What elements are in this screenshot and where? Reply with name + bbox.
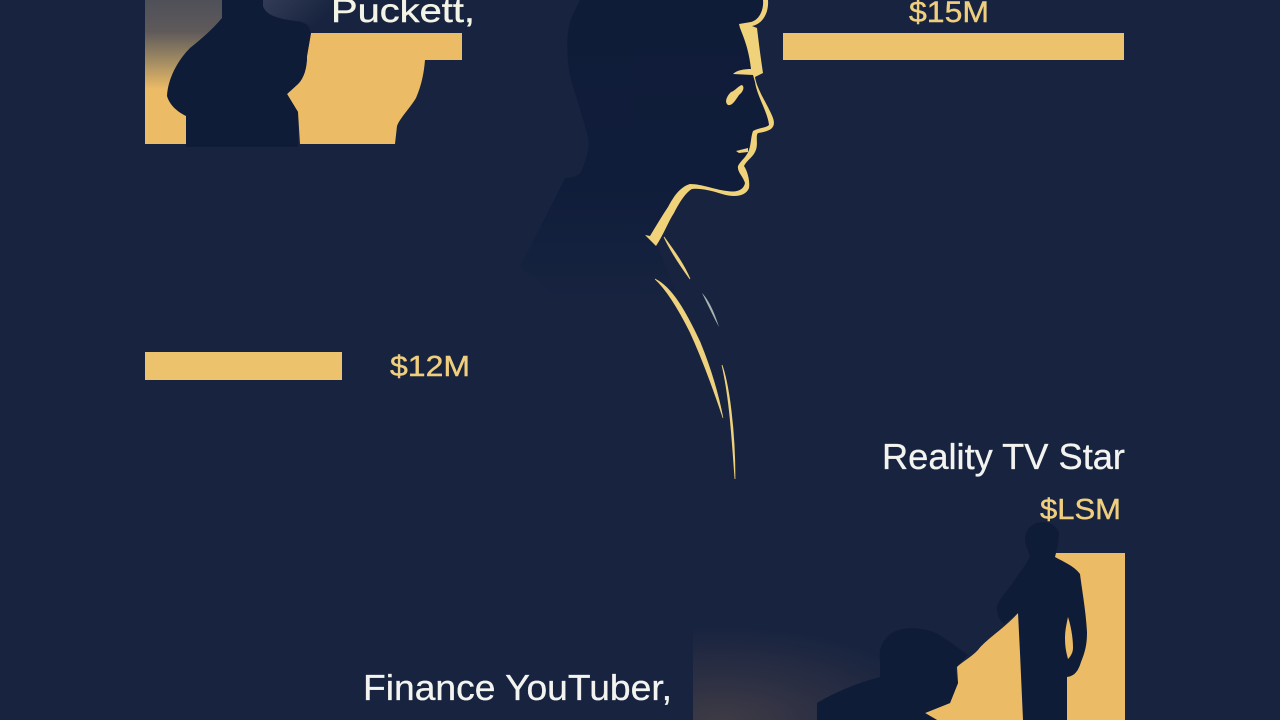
collar and shoulder lines <box>664 237 690 279</box>
label: Finance YouTuber: Finance YouTuber, <box>363 667 672 708</box>
bar <box>145 352 342 380</box>
panel: bottom right bar with silhouettes <box>693 522 1125 720</box>
name: Reality TV Star <box>882 436 1125 477</box>
silhouette: person <box>167 0 311 147</box>
head and shoulders <box>520 0 773 300</box>
gold bar lower shape <box>925 613 1060 720</box>
value bar: $15M <box>783 0 1124 60</box>
panel: Puckett bar chart <box>145 0 475 147</box>
faded glow <box>693 620 933 720</box>
eye <box>726 85 743 105</box>
central profile silhouette <box>520 0 774 479</box>
bar <box>783 33 1124 60</box>
silhouette: man in cap <box>817 628 968 720</box>
mouth line <box>736 148 748 153</box>
gold profile outline <box>645 0 774 246</box>
gold bar shape <box>287 33 462 144</box>
faded backdrop behind head <box>262 0 331 28</box>
value bar: $12M <box>145 351 470 383</box>
silhouette: standing man <box>997 522 1087 720</box>
value: $LSM <box>1040 494 1121 526</box>
value label: $12M <box>390 351 470 383</box>
gold bar <box>1055 553 1125 720</box>
label: Reality TV Star <box>882 436 1125 526</box>
faded left bar <box>145 0 235 144</box>
gap between arm and body <box>1065 617 1073 659</box>
